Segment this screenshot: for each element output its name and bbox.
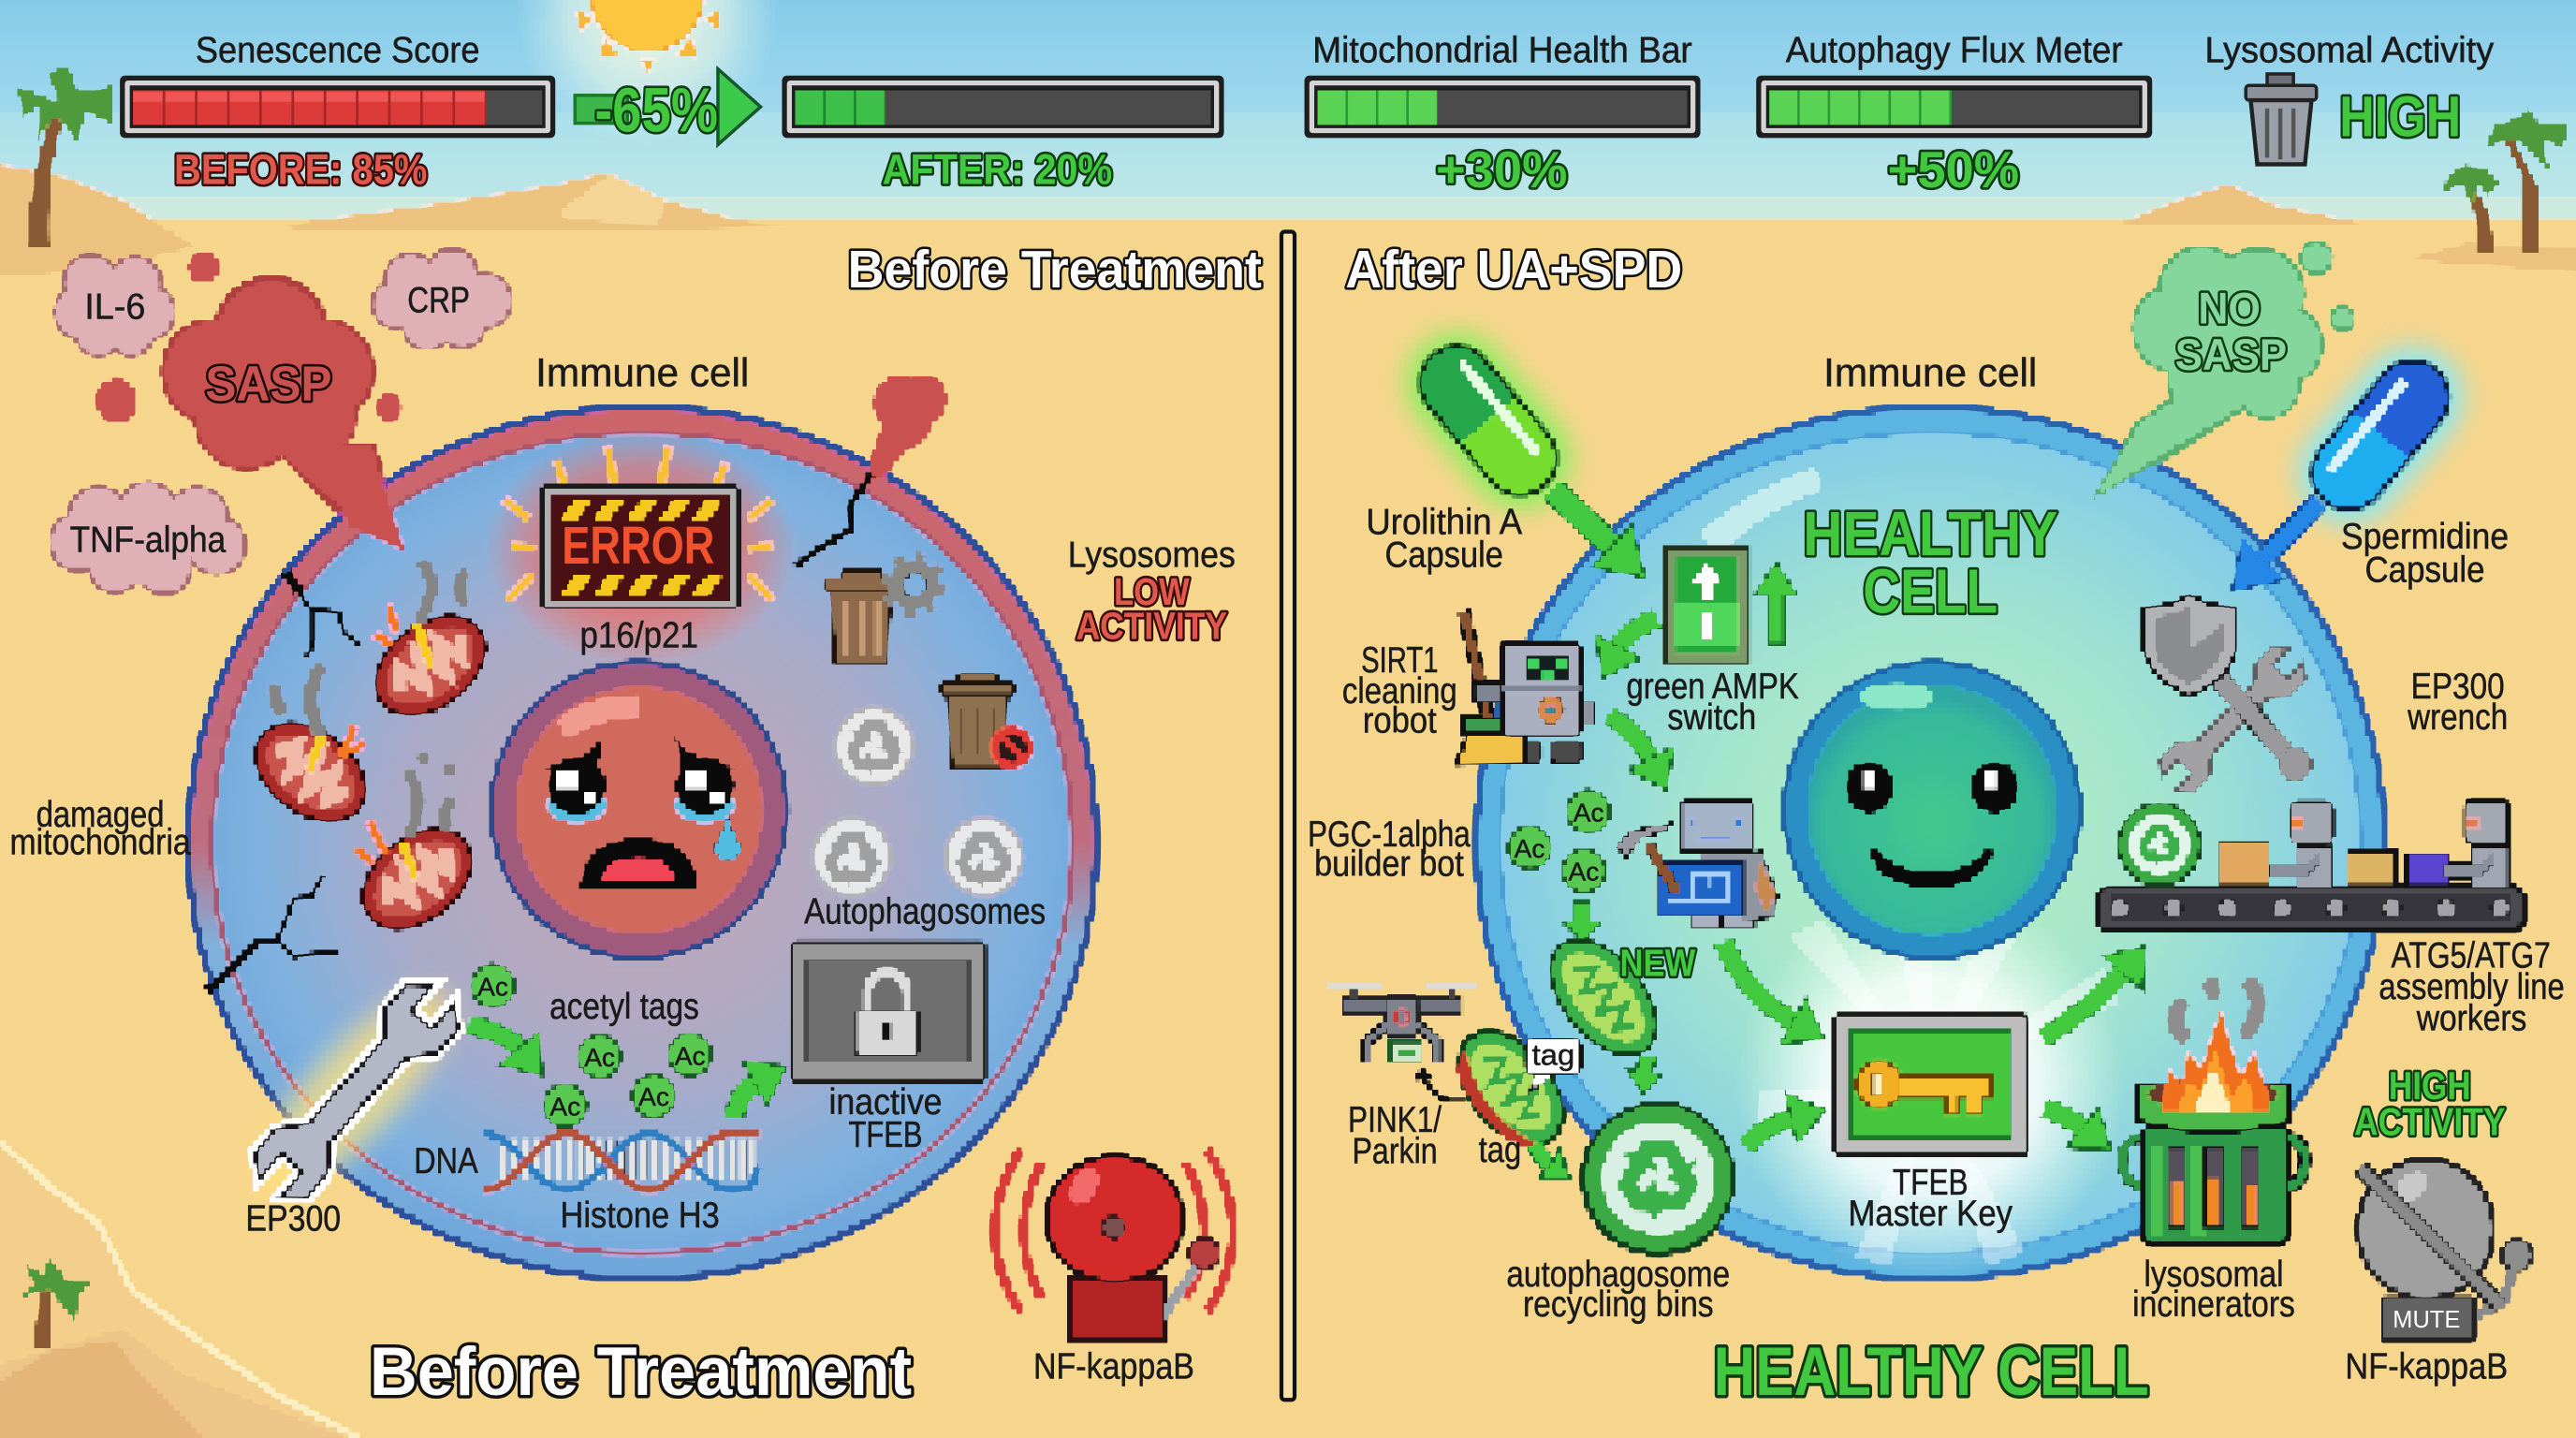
pathway arrows to and from TFEB — [1723, 942, 2126, 1147]
blocked trash can — [942, 673, 1030, 768]
label: TFEB master key — [1848, 1163, 2013, 1234]
heading: before treatment top: Before Treatment — [848, 240, 1262, 299]
label: TFEB master key: Master Key — [1848, 1194, 2013, 1234]
title: before treatment bottom: Before Treatment — [370, 1332, 912, 1410]
bar: before 85 percent — [120, 76, 555, 138]
labels: Ac tags: Ac — [675, 1041, 706, 1070]
acetyl tag circles — [472, 964, 711, 1127]
PINK1/Parkin drone — [1329, 988, 1475, 1062]
smiling nucleus — [1784, 662, 2080, 958]
label: SASP: SASP — [205, 357, 332, 412]
label: spermidine capsule — [2341, 517, 2509, 590]
EP300 wrench glowing — [230, 965, 476, 1220]
small arrow down to bin — [1627, 1056, 1661, 1094]
label: inactive TFEB: inactive — [828, 1082, 943, 1123]
label: immune cell: Immune cell — [1823, 350, 2037, 395]
urolithin A capsule — [1387, 314, 1589, 528]
right dunes and palms — [2119, 109, 2576, 272]
bar: mitochondrial health — [1305, 76, 1701, 138]
label: inactive TFEB — [828, 1082, 943, 1155]
label: healthy cell inside: HEALTHY — [1803, 500, 2057, 569]
up arrow — [1754, 562, 1797, 644]
capsule arrows — [1553, 490, 2320, 564]
leaking red smoke — [862, 376, 946, 486]
autophagosome discs — [814, 708, 1022, 896]
value: plus 50 percent: +50% — [1888, 141, 2019, 198]
Ac tag circles — [1508, 790, 1610, 892]
senescence score after — [782, 76, 1224, 194]
label: lysosomes low activity: Lysosomes — [1068, 535, 1236, 575]
green AMPK switch — [1666, 547, 1748, 664]
label: green AMPK switch: green AMPK — [1627, 667, 1799, 707]
PGC-1alpha builder bot — [1617, 801, 1778, 929]
label: damaged mitochondria — [10, 795, 191, 863]
label: PGC-1alpha builder bot: PGC-1alpha — [1308, 814, 1471, 855]
label: high activity: ACTIVITY — [2354, 1100, 2506, 1144]
labels: Ac tags: Ac — [477, 973, 508, 1002]
label: PINK1/Parkin — [1348, 1100, 1442, 1172]
labels: Ac tags — [477, 973, 706, 1122]
arrow: minus 65 percent: -65% — [594, 76, 718, 145]
label: damaged mitochondria: mitochondria — [10, 823, 191, 863]
label: high activity — [2354, 1064, 2506, 1144]
EP300 shield and wrench — [2144, 594, 2314, 800]
cytokine cloud IL-6 — [54, 255, 176, 357]
lysosome trash can with gear — [825, 557, 943, 665]
label: EP300 wrench: EP300 — [2411, 667, 2505, 707]
label: urolithin A capsule: Capsule — [1385, 535, 1503, 575]
arrow tag to bin — [1534, 1143, 1553, 1167]
label: SIRT1 cleaning robot: robot — [1363, 701, 1437, 741]
label: lysosomal incinerators — [2132, 1255, 2295, 1325]
label: PINK1/Parkin: PINK1/ — [1348, 1100, 1442, 1140]
label: ERROR: ERROR — [562, 516, 714, 575]
left dunes and palm — [0, 66, 805, 276]
label: high activity: HIGH — [2389, 1064, 2471, 1108]
tagged mitochondrion — [1414, 1013, 1583, 1162]
healthy cell body — [1477, 407, 2384, 1278]
label: lysosomes low activity: LOW — [1114, 570, 1190, 613]
label: lysosomes low activity: ACTIVITY — [1076, 605, 1227, 648]
heading: lysosomal activity: Lysosomal Activity — [2204, 31, 2495, 71]
SIRT1 cleaning robot — [1457, 611, 1593, 764]
labels: Ac tags: Ac — [1573, 799, 1604, 828]
label: inactive TFEB: TFEB — [849, 1115, 922, 1155]
panel: after UA+SPD — [1308, 240, 2565, 1410]
arrow to inactive TFEB — [735, 1081, 759, 1117]
arrow to robot — [1617, 618, 1658, 651]
label: PGC-1alpha builder bot: builder bot — [1314, 844, 1464, 884]
label: immune cell: Immune cell — [535, 350, 749, 395]
cytokine cloud TNF-alpha — [50, 481, 246, 594]
label: lysosomes low activity — [1068, 535, 1236, 648]
label: NO SASP: SASP — [2175, 330, 2287, 380]
spermidine capsule — [2279, 329, 2481, 543]
label: PGC-1alpha builder bot — [1308, 814, 1471, 884]
label: DNA: DNA — [414, 1141, 478, 1181]
SASP tail over membrane — [337, 477, 406, 552]
heading: senescence score: Senescence Score — [196, 31, 479, 71]
muted NF-kappaB bell — [2358, 1160, 2532, 1339]
arrow from robot to builder — [1608, 714, 1653, 762]
value: after 20 percent: AFTER: 20% — [882, 146, 1112, 194]
damaged mitochondria — [237, 565, 504, 948]
lysosomal activity metric — [2204, 31, 2495, 165]
label: TFEB master key: TFEB — [1893, 1163, 1969, 1203]
labels: Ac tags: Ac — [584, 1043, 615, 1072]
autophagosome recycling bin — [1584, 1104, 1734, 1253]
bar: autophagy flux — [1756, 76, 2152, 138]
label: autophagosomes: Autophagosomes — [804, 891, 1046, 932]
value: plus 30 percent: +30% — [1436, 141, 1567, 198]
label: tag bubble: tag — [1532, 1037, 1574, 1071]
label: EP300 wrench: wrench — [2407, 697, 2508, 738]
label: tag: tag — [1479, 1130, 1521, 1170]
NO SASP green cloud — [2089, 243, 2353, 501]
membrane cracks — [209, 473, 872, 990]
label: healthy cell inside — [1803, 500, 2057, 627]
label: Histone H3: Histone H3 — [560, 1196, 720, 1236]
label: ATG5/ATG7 assembly line workers: workers — [2416, 998, 2526, 1038]
label: IL-6: IL-6 — [84, 286, 145, 327]
inactive TFEB lock box — [792, 943, 984, 1081]
senescence score before — [120, 31, 555, 194]
label: NO SASP — [2175, 285, 2287, 380]
bottom-left dune with palm — [0, 1142, 361, 1438]
label: SIRT1 cleaning robot: SIRT1 — [1361, 640, 1439, 681]
value: high: HIGH — [2339, 85, 2461, 150]
mitochondrial health metric — [1305, 31, 1701, 198]
label: MUTE: MUTE — [2393, 1305, 2460, 1333]
label: lysosomal incinerators: incinerators — [2132, 1284, 2295, 1325]
heading: autophagy flux meter: Autophagy Flux Meter — [1786, 31, 2123, 71]
TFEB master key box — [1835, 1016, 2027, 1155]
icon: grey trash can — [2246, 74, 2317, 165]
label: autophagosome recycling bins — [1506, 1255, 1730, 1325]
labels: Ac tags: Ac — [638, 1082, 669, 1111]
label: NF-kappaB: NF-kappaB — [2345, 1346, 2508, 1387]
label: EP300: EP300 — [245, 1199, 341, 1240]
heading: mitochondrial health bar: Mitochondrial Health Bar — [1312, 31, 1692, 71]
bar: after 20 percent — [782, 76, 1224, 138]
label: lysosomal incinerators: lysosomal — [2144, 1255, 2284, 1295]
panel: top metrics HUD — [120, 31, 2495, 198]
label: autophagosome recycling bins: autophagosome — [1506, 1255, 1730, 1295]
acetyl transfer arrow — [468, 1025, 522, 1051]
label: urolithin A capsule: Urolithin A — [1366, 502, 1522, 542]
label: ATG5/ATG7 assembly line workers — [2378, 936, 2565, 1038]
label: p16/p21: p16/p21 — [580, 615, 698, 655]
label: NEW: NEW — [1620, 941, 1696, 984]
label: SIRT1 cleaning robot: cleaning — [1342, 671, 1457, 712]
down arrow — [1562, 902, 1602, 942]
labels: Ac tags — [1515, 799, 1604, 887]
lysosomal incinerator — [2122, 986, 2305, 1242]
autophagy flux metric — [1756, 31, 2152, 198]
label: damaged mitochondria: damaged — [37, 795, 165, 835]
label: urolithin A capsule — [1366, 502, 1522, 575]
label: CRP: CRP — [407, 280, 470, 320]
SASP secretion cloud — [97, 253, 406, 552]
label: NF-kappaB: NF-kappaB — [1033, 1346, 1194, 1387]
label: spermidine capsule: Spermidine — [2341, 517, 2509, 557]
label: green AMPK switch — [1627, 667, 1799, 738]
NF-kappaB alarm bell — [995, 1151, 1233, 1339]
label: healthy cell inside: CELL — [1863, 558, 1998, 627]
title: healthy cell bottom: HEALTHY CELL — [1714, 1332, 2149, 1410]
cytokine cloud CRP — [372, 248, 513, 350]
sun — [516, 0, 779, 144]
damaged cell body — [189, 407, 1096, 1278]
labels: Ac tags: Ac — [549, 1093, 580, 1122]
label: autophagosome recycling bins: recycling bins — [1523, 1284, 1714, 1325]
labels: Ac tags: Ac — [1515, 834, 1544, 863]
panel: before treatment — [10, 240, 1262, 1410]
p16/p21 error sign — [485, 429, 797, 666]
divider between before and after — [1281, 231, 1295, 1400]
label: acetyl tags: acetyl tags — [549, 987, 699, 1027]
conveyor belt assembly line — [2097, 801, 2524, 930]
new mitochondrion — [1530, 920, 1676, 1074]
value: before 85 percent: BEFORE: 85% — [174, 146, 427, 194]
label: green AMPK switch: switch — [1667, 697, 1756, 738]
label: PINK1/Parkin: Parkin — [1352, 1132, 1438, 1172]
sad face nucleus — [491, 662, 787, 958]
label: TNF-alpha: TNF-alpha — [70, 521, 227, 561]
label: SIRT1 cleaning robot — [1342, 640, 1457, 741]
DNA helix — [485, 1134, 761, 1190]
label: NO SASP: NO — [2198, 285, 2261, 334]
label: EP300 wrench — [2407, 667, 2508, 738]
TFEB glow — [1736, 890, 2124, 1278]
heading: after UA+SPD: After UA+SPD — [1345, 240, 1682, 299]
labels: Ac tags: Ac — [1569, 858, 1599, 887]
label: spermidine capsule: Capsule — [2364, 550, 2485, 590]
